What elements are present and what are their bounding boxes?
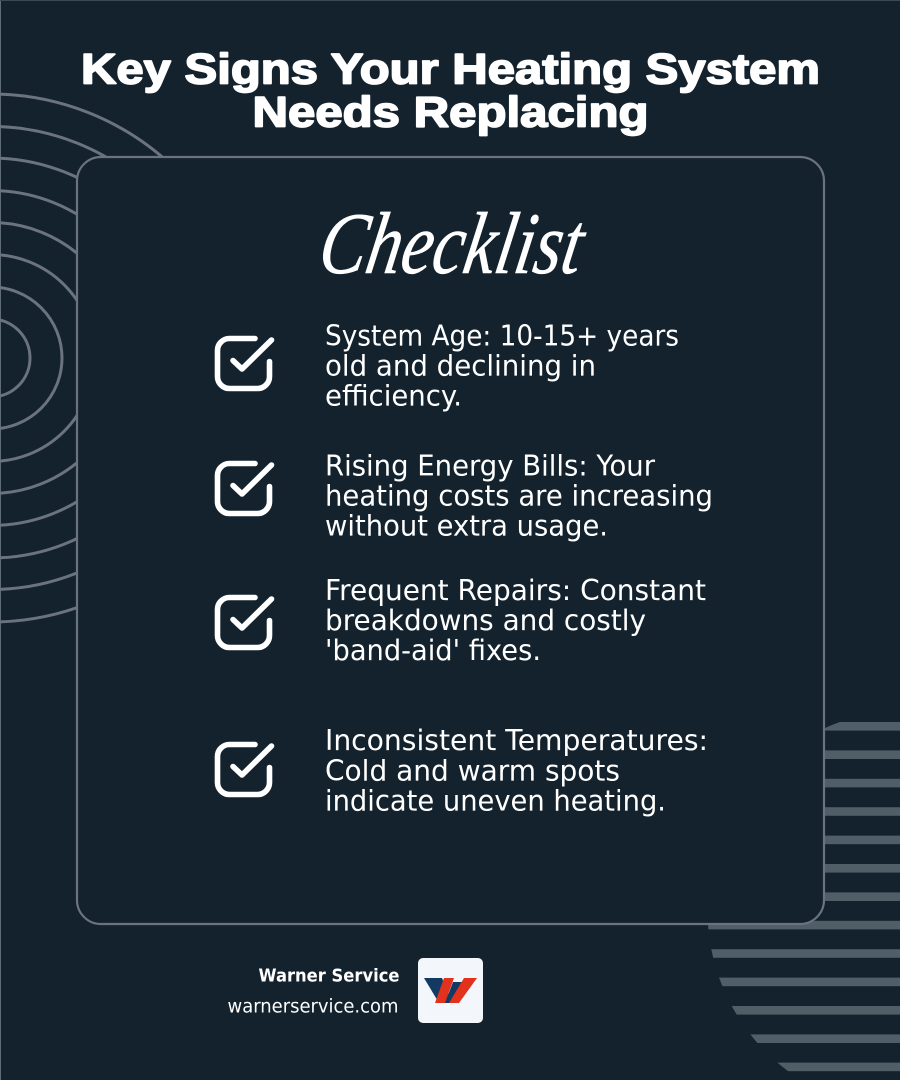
title: Key Signs Your Heating System <box>81 46 820 94</box>
text: frequent repairs: 'band-aid' fixes. <box>325 634 541 667</box>
title <box>81 46 820 136</box>
text: frequent repairs <box>325 574 706 667</box>
text: inconsistent temperatures: indicate uneven heating. <box>325 784 666 818</box>
footer: website: warnerservice.com <box>228 996 398 1018</box>
text: system age: old and declining in <box>325 349 596 382</box>
text: rising energy bills <box>325 449 713 542</box>
text: inconsistent temperatures <box>325 724 708 818</box>
text: frequent repairs: breakdowns and costly <box>325 604 646 637</box>
footer: company name: Warner Service <box>258 966 400 986</box>
icon: checkbox 3 <box>218 598 272 648</box>
text: inconsistent temperatures: Inconsistent Temperatures: <box>325 724 708 757</box>
text: system age: efficiency. <box>325 379 462 412</box>
icon: Warner logo <box>418 958 483 1023</box>
text: inconsistent temperatures: Cold and warm spots <box>325 754 620 788</box>
heading: Checklist: Checklist <box>313 196 594 293</box>
text: rising energy bills: Rising Energy Bills: Your <box>325 449 655 482</box>
panel: checklist card <box>77 157 824 924</box>
text: rising energy bills: heating costs are increasing <box>325 479 713 512</box>
icon: checkbox 2 <box>218 464 272 514</box>
text: frequent repairs: Frequent Repairs: Constant <box>325 574 706 607</box>
decorative striped circle <box>700 722 900 1071</box>
title: Needs Replacing <box>252 88 648 136</box>
decorative concentric arcs <box>0 94 255 622</box>
text: rising energy bills: without extra usage. <box>325 509 608 542</box>
icon: checkbox 4 <box>218 744 272 794</box>
text: system age: System Age: 10-15+ years <box>325 319 679 352</box>
text: system age <box>325 319 679 412</box>
icon: checkbox 1 <box>218 338 272 388</box>
